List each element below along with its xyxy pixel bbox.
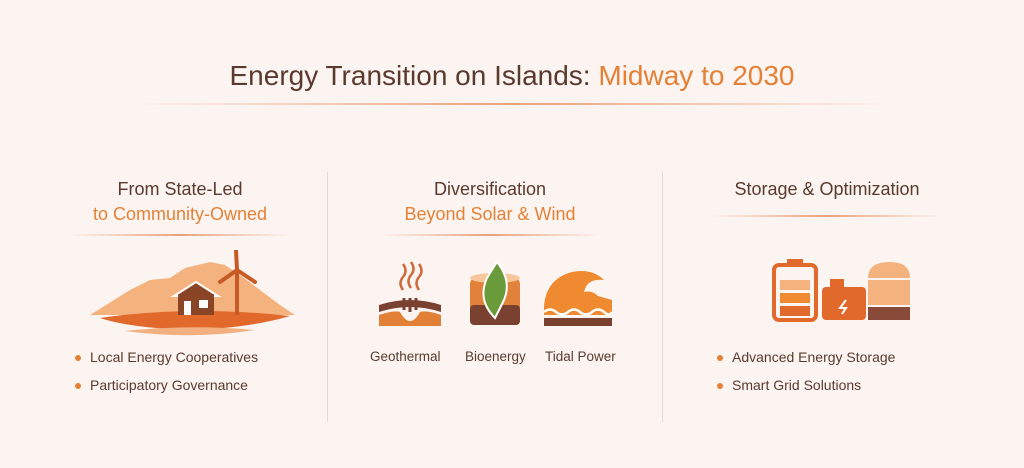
bullets: Local Energy Cooperatives	[90, 349, 258, 365]
heading	[93, 179, 267, 224]
bullets: Participatory Governance	[90, 377, 248, 393]
icon: tidal power	[544, 271, 612, 326]
icon: island with house and wind turbine	[90, 250, 295, 336]
heading: From State-Led	[117, 179, 243, 199]
bullets: Smart Grid Solutions	[732, 377, 861, 393]
heading	[404, 179, 576, 224]
labels: Geothermal	[370, 349, 441, 364]
panel: community	[75, 179, 295, 393]
heading: Storage & Optimization	[734, 179, 920, 199]
icon: geothermal	[379, 261, 441, 326]
panel: diversification: Bioenergy	[465, 349, 526, 364]
heading: Diversification	[434, 179, 546, 199]
panel: diversification: Tidal Power	[545, 349, 616, 364]
icon: bioenergy	[470, 260, 520, 325]
heading: to Community-Owned	[93, 204, 267, 224]
panel: storage	[717, 179, 934, 393]
panel: diversification	[370, 179, 616, 364]
title: Energy Transition on Islands: Midway to 2030	[230, 60, 794, 91]
bullets: Advanced Energy Storage	[732, 349, 895, 365]
bullets	[717, 349, 895, 393]
icon: batteries and storage	[772, 259, 910, 322]
heading: Beyond Solar & Wind	[404, 204, 576, 224]
bullets	[75, 349, 258, 393]
